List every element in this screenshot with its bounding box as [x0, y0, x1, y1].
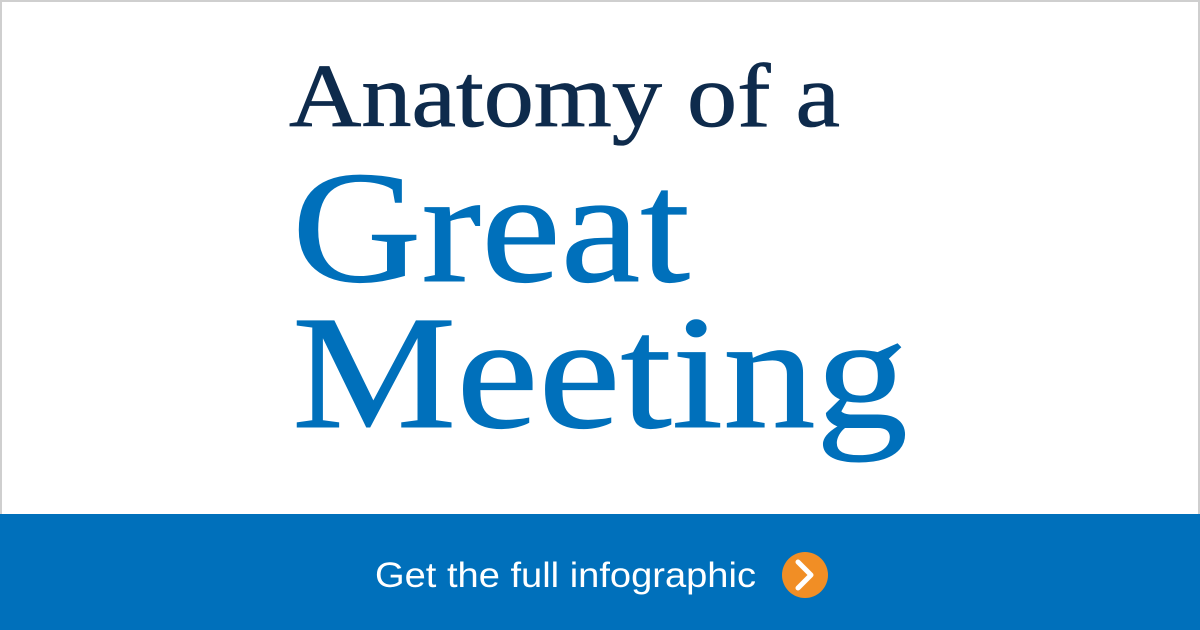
footer band [0, 514, 1200, 630]
title line: Great: Great [292, 138, 690, 316]
title line: Anatomy of a: Anatomy of a [289, 47, 840, 146]
icon: orange arrow button [782, 552, 828, 598]
title line: Meeting: Meeting [292, 284, 908, 463]
call to action text: Get the full infographic [375, 556, 756, 595]
title [289, 47, 908, 463]
